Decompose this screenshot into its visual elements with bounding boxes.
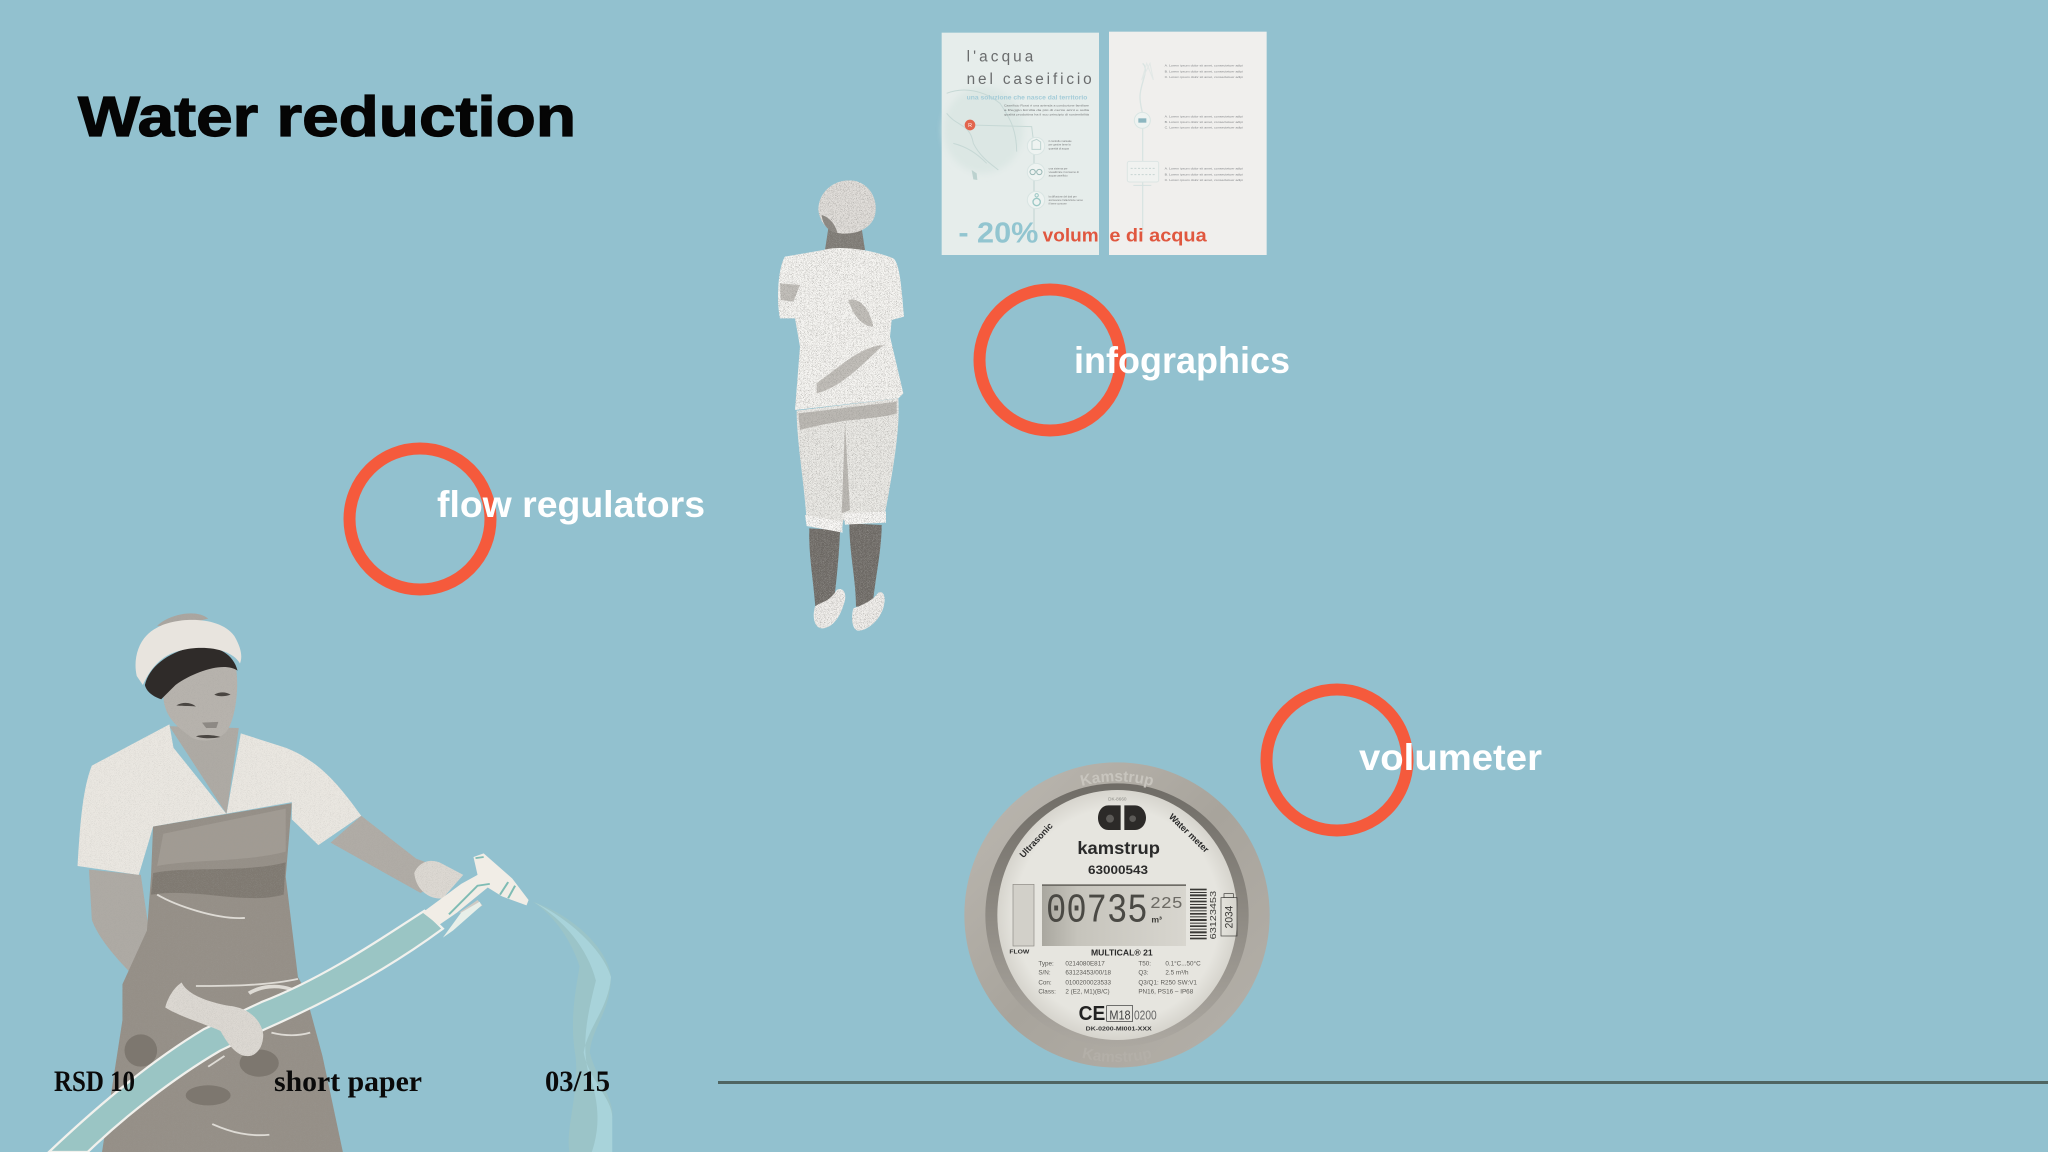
poster page 2: B. Lorem ipsum dolor sit amet, consectetuer adipi [1165,172,1243,176]
poster page 1: quantità di acqua [1049,146,1069,150]
circle ring [1266,690,1408,830]
poster page 1: una soluzione che nasce dal territorio [967,95,1088,101]
poster page 1: una sistema per [1049,166,1068,170]
apron highlights [157,895,310,1135]
poster page 1: il bene comune [1049,202,1067,206]
face details [176,692,231,738]
specifications: Q3/Q1: R250 SW:V1 [1138,979,1197,986]
poster page 2: A. Lorem ipsum dolor sit amet, consectetuer adipi [1165,114,1243,118]
footer: page number: 03/15 [545,1065,610,1098]
water meter photo [964,762,1270,1068]
water meter photo: 63123453 [1208,891,1218,939]
water stream [533,902,612,1152]
meter labels [1009,797,1211,957]
lcd display: m³ [1151,915,1162,925]
circle ring [350,448,490,590]
poster page 2: B. Lorem ipsum dolor sit amet, consectetuer adipi [1165,120,1243,124]
poster page 2: C. Lorem ipsum dolor sit amet, consectetuer adipi [1165,178,1243,182]
poster page 2: A. Lorem ipsum dolor sit amet, consectetuer adipi [1165,167,1243,171]
footer rule [718,1081,2048,1084]
specifications: Con: [1038,979,1052,986]
embossed brand: Kamstrup [1080,772,1153,788]
specifications: Q3: [1138,970,1149,977]
lcd display [1042,884,1186,946]
specifications: PN16, PS16 – IP68 [1138,989,1194,996]
poster headline: -20% volume di acqua [958,217,1207,249]
specifications: Class: [1038,989,1056,996]
spray nozzle [422,853,529,938]
meter labels: MULTICAL® 21 [1091,947,1153,957]
poster page 1: la diffusione del dati per [1049,194,1077,198]
poster page 1: acqua caseificio [1049,174,1068,178]
optical port icon [1098,805,1146,830]
poster: infographics pages [942,32,1267,255]
specifications: Type: [1038,961,1054,968]
specifications: 0214080E817 [1065,961,1105,968]
footer [54,1065,2048,1098]
CE marking: M18 [1109,1007,1131,1022]
CE marking: DK-0200-MI001-XXX [1086,1027,1152,1033]
meter labels: FLOW [1009,949,1031,955]
lcd display: 00735 [1046,888,1148,934]
poster page 1: qualità produttiva ha il suo principio di sostenibilità [1004,113,1090,117]
poster headline: -20% volume di acqua: - 20% [958,217,1038,249]
specifications: 2 (E2, M1)(B/C) [1065,989,1110,996]
meter labels: Ultrasonic [1017,821,1055,860]
circle ring [980,290,1120,430]
meter labels: kamstrup [1077,838,1160,858]
meter face [997,790,1237,1040]
marker: infographics [980,290,1290,430]
CE marking: 0200 [1134,1007,1157,1022]
hair [145,646,238,699]
specifications [1038,960,1201,996]
poster page 2: A. Lorem ipsum dolor sit amet, consectetuer adipi [1165,64,1243,68]
poster page 2: C. Lorem ipsum dolor sit amet, consectetuer adipi [1165,75,1243,79]
meter labels: 63000543 [1088,863,1148,877]
label: infographics [1074,340,1290,381]
poster page 1: il controllo manuale [1049,139,1072,143]
poster page 2: C. Lorem ipsum dolor sit amet, consectetuer adipi [1165,126,1243,130]
poster page 1: l'acqua [967,48,1034,65]
figure: worker holding hose [49,613,612,1152]
poster page 1: Caseificio Rossi è una azienda a conduzione familiare [1004,104,1090,108]
CE marking [1079,1002,1157,1033]
label: volumeter [1359,737,1542,778]
hose [49,911,443,1152]
specifications: T50: [1138,961,1151,968]
label: flow regulators [437,484,705,525]
figure: worker seen from behind [778,180,904,631]
worker body [78,613,461,1152]
marker: volumeter [1266,690,1542,830]
poster page 1: per gestire bene la [1049,143,1071,147]
marker: flow regulators [350,448,705,590]
meter bezel [964,762,1270,1068]
specifications: 0100200023533 [1065,979,1112,986]
poster page 1: nel caseificio [967,71,1092,88]
poster page 1 [942,33,1099,255]
specifications: 63123453/00/18 [1065,970,1112,977]
battery date box: 2034 [1224,906,1236,928]
battery date box [1221,894,1237,936]
meter labels: Water meter [1167,812,1211,855]
poster page 1: R [968,123,972,129]
flow window [1013,884,1034,946]
poster page 2: B. Lorem ipsum dolor sit amet, consectetuer adipi [1165,69,1243,73]
gloves [165,861,463,1056]
water meter photo: Kamstrup [1081,1045,1153,1066]
meter labels: DK-8660 [1108,797,1127,802]
specifications: S/N: [1038,970,1051,977]
poster page 1: visualizzare il consumo di [1049,170,1079,174]
poster page 2 [1109,32,1267,255]
title: Water reduction [78,85,576,149]
poster headline: -20% volume di acqua: volum [1043,224,1099,245]
footer: conference: RSD 10 [54,1065,135,1098]
footer: section: short paper [274,1065,422,1098]
lcd display: 225 [1150,895,1183,914]
barcode [1190,889,1207,939]
poster page 1: accrescere l'attenzione verso [1049,198,1084,202]
poster headline: -20% volume di acqua: e di acqua [1109,224,1207,245]
hat band [136,620,241,685]
poster page 1: a Reggio Emilia da più di cento anni e sulla [1004,108,1090,112]
specifications: 2.5 m³/h [1165,970,1189,977]
specifications: 0.1°C...50°C [1165,960,1201,968]
CE marking: CE [1079,1002,1105,1025]
